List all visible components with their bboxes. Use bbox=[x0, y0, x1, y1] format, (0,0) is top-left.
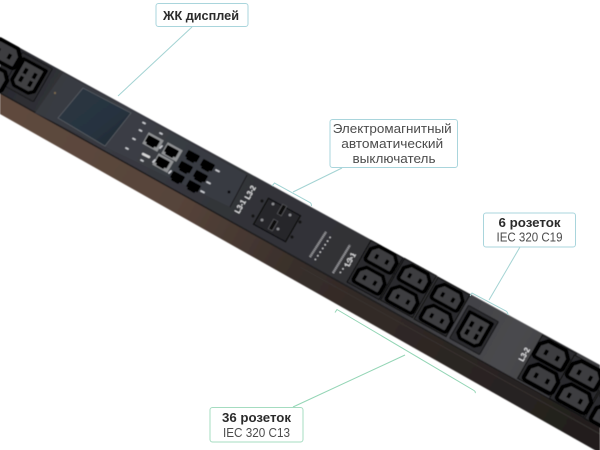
leader line bbox=[118, 27, 192, 96]
C13 outlets, L3-1 group bbox=[347, 240, 470, 337]
label text: Электромагнитный bbox=[333, 121, 452, 136]
callout: 36 C13 outlets bbox=[210, 310, 475, 442]
screw bbox=[228, 190, 230, 194]
label text: 6 розеток bbox=[498, 215, 561, 230]
label box bbox=[156, 4, 248, 26]
bracket bbox=[272, 183, 312, 206]
callout: 6 C19 outlets: IEC 320 C19 bbox=[496, 230, 562, 244]
label box bbox=[210, 408, 303, 442]
leader line bbox=[489, 247, 520, 300]
device side panel bbox=[0, 91, 600, 450]
label box bbox=[330, 120, 458, 168]
label: L3-1 outlets: L3-1 bbox=[342, 251, 358, 268]
label box bbox=[484, 213, 576, 247]
small printed markings and LEDs bbox=[310, 232, 355, 273]
label text: выключатель bbox=[352, 151, 436, 166]
leader line bbox=[293, 168, 342, 192]
LCD screen bbox=[58, 88, 131, 146]
screw near display bbox=[54, 92, 56, 94]
callout: 36 C13 outlets: IEC 320 C13 bbox=[223, 425, 290, 440]
network ports bbox=[142, 132, 214, 193]
section seam bbox=[230, 175, 247, 207]
bracket bbox=[470, 293, 508, 315]
C13 outlets, L3-2 group bbox=[518, 335, 600, 437]
C19 outlet bbox=[450, 305, 498, 355]
callout: electromagnetic breaker bbox=[272, 120, 458, 206]
callout: 6 C19 outlets bbox=[470, 213, 576, 315]
display section plate bbox=[35, 73, 247, 207]
panel edge line bbox=[0, 93, 600, 427]
bracket bbox=[335, 310, 475, 393]
left outlet pieces bbox=[0, 36, 24, 92]
left C19 outlet bbox=[4, 52, 52, 102]
circuit breaker block bbox=[251, 198, 302, 242]
label: L3-2 outlets: L3-2 bbox=[516, 346, 532, 363]
label text: ЖК дисплей bbox=[162, 8, 239, 23]
label text: автоматический bbox=[341, 136, 443, 151]
silver port frames bbox=[142, 132, 183, 173]
port indicators and markings bbox=[126, 122, 219, 192]
label text: 36 розеток bbox=[222, 410, 291, 425]
leader line bbox=[293, 355, 405, 407]
label: L3-1: L3-1 bbox=[232, 198, 248, 215]
callout: LCD display bbox=[118, 4, 248, 96]
label: L3-2: L3-2 bbox=[242, 184, 258, 201]
